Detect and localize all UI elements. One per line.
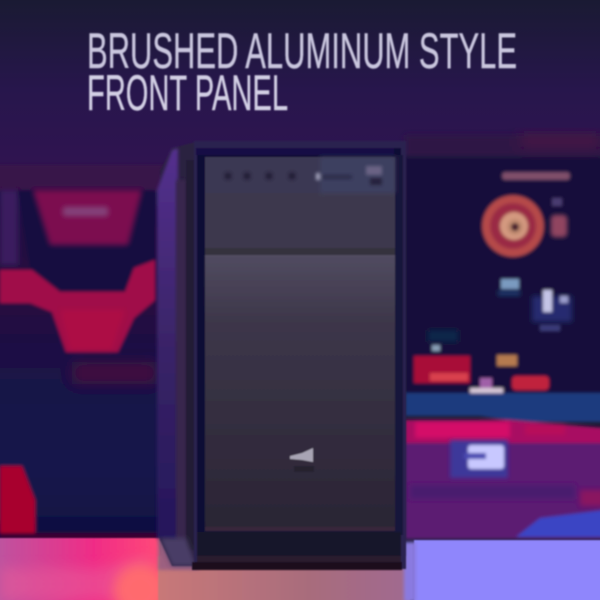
chair red base — [0, 466, 35, 535]
pink band — [405, 420, 600, 445]
poster label — [502, 172, 570, 180]
chair headrest — [33, 190, 142, 245]
title — [87, 23, 517, 121]
left scene: gaming chair — [0, 165, 165, 540]
title: FRONT PANEL — [87, 65, 288, 121]
PC case — [157, 141, 406, 570]
desk surface — [0, 538, 600, 600]
right scene: poster and shelf — [405, 135, 600, 539]
front panel top section — [205, 157, 395, 255]
case side panel — [160, 142, 196, 566]
chair dark recess — [18, 190, 155, 290]
background wall — [0, 0, 600, 200]
case plinth — [205, 527, 395, 531]
shelf objects — [414, 356, 470, 383]
lit sign — [450, 440, 508, 478]
poster target — [482, 195, 544, 257]
case front frame — [194, 141, 406, 569]
blue glow object — [516, 510, 600, 537]
logo — [290, 448, 314, 472]
front IO buttons — [224, 166, 382, 185]
poster blue icons — [501, 279, 519, 289]
shelf blue band — [405, 393, 600, 422]
brushed lower panel — [205, 255, 395, 530]
chair red body — [0, 260, 155, 352]
lower wall purple — [405, 443, 600, 539]
